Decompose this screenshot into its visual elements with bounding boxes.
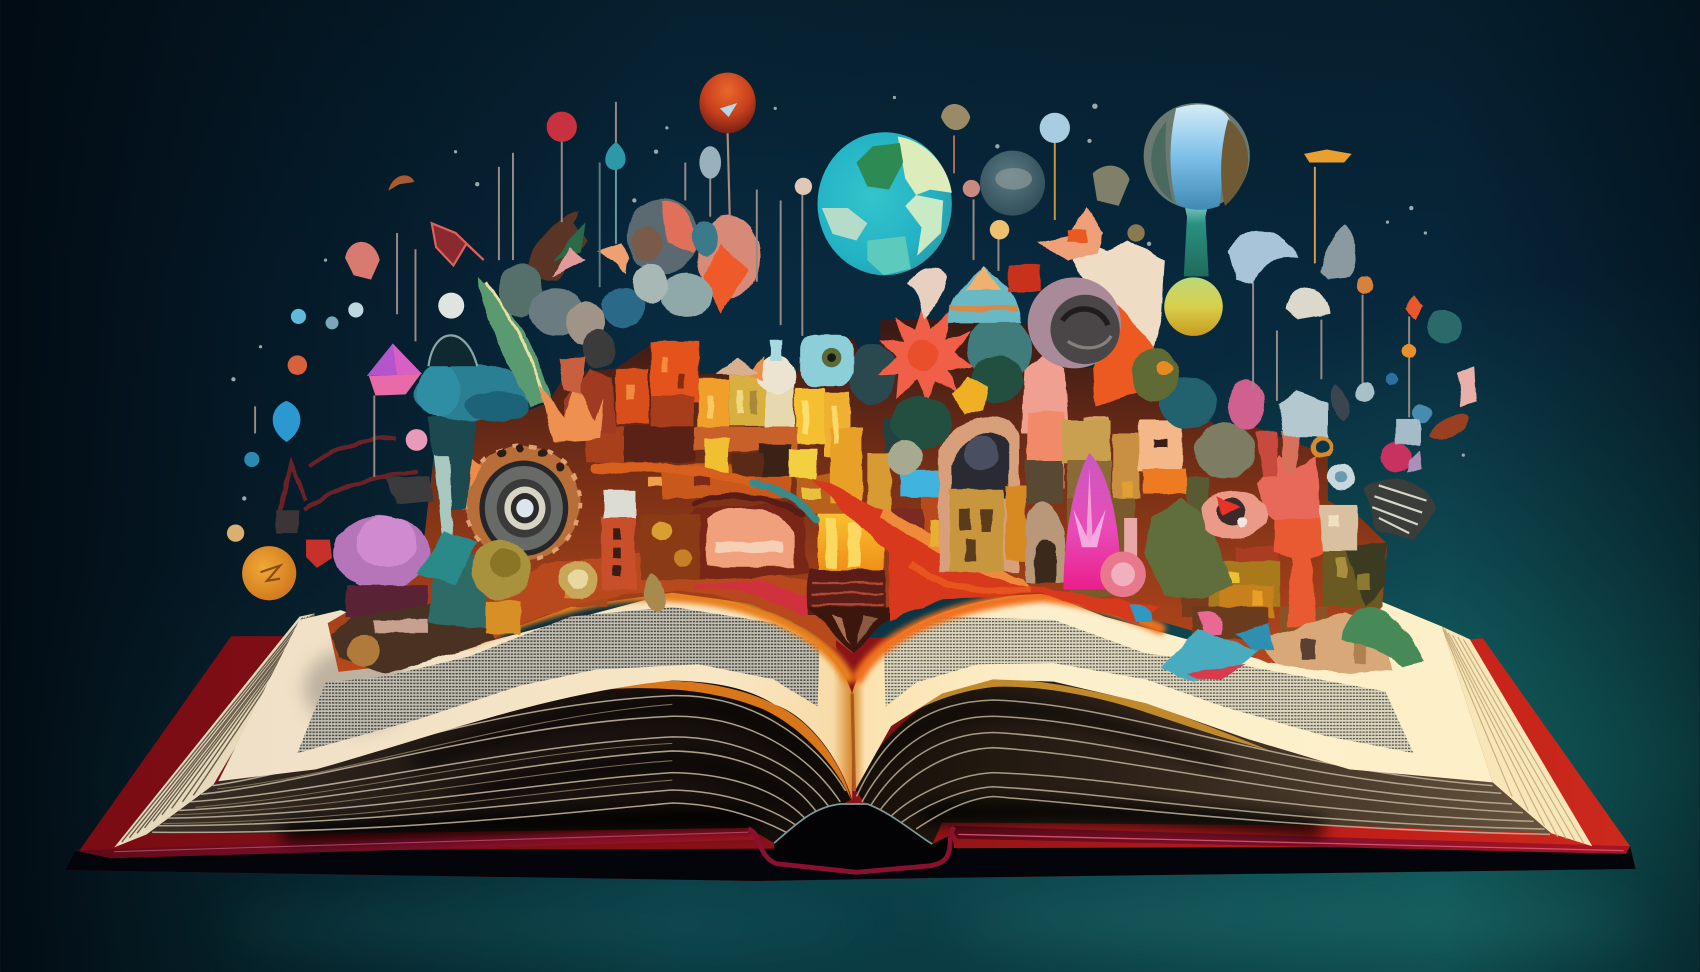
dark green bush xyxy=(891,397,952,449)
left tower xyxy=(602,516,635,589)
salmon dress xyxy=(1257,455,1320,520)
gear machine xyxy=(458,444,580,560)
olive gold bush xyxy=(472,540,530,600)
dark red block xyxy=(808,570,886,615)
sky blue block xyxy=(900,470,939,497)
beige arch house xyxy=(1026,502,1067,583)
pale blue robot xyxy=(800,334,853,386)
left orange page edge xyxy=(607,681,851,800)
gold and right mass xyxy=(1209,561,1280,607)
cover black underside xyxy=(65,846,1636,881)
red planet xyxy=(699,73,756,217)
cream feather xyxy=(907,268,948,319)
golden buildings xyxy=(698,379,729,427)
right gold page edge xyxy=(891,679,1268,750)
red box xyxy=(1008,264,1041,293)
floating bubbles xyxy=(596,198,760,316)
fine building details xyxy=(394,358,1370,658)
purple flower xyxy=(334,516,430,589)
orange red tower xyxy=(1275,516,1322,626)
teal bush xyxy=(967,316,1032,381)
page glow under the city xyxy=(469,595,1160,677)
disc machine and fins xyxy=(1036,208,1165,406)
stems and lollipops xyxy=(255,102,1409,477)
left foliage and flower xyxy=(277,211,666,674)
small floating objects left xyxy=(227,112,626,600)
dome interior under the left arch xyxy=(672,501,808,580)
rust band along the left page xyxy=(477,553,837,650)
green leaf xyxy=(477,276,551,406)
robot eye xyxy=(822,348,841,367)
warm fill patches xyxy=(542,344,1279,618)
right orange bridge xyxy=(813,477,1160,623)
left page xyxy=(218,593,852,800)
shells on the right page xyxy=(1161,607,1424,683)
glass bubbles xyxy=(499,264,542,316)
bottom funnel xyxy=(808,607,900,653)
glass sphere xyxy=(980,151,1045,216)
yellow lantern xyxy=(952,377,989,414)
tan arch building xyxy=(939,416,1019,572)
small floating objects right xyxy=(1228,225,1476,540)
pink band along the centre xyxy=(694,580,824,618)
city base mass xyxy=(328,320,1387,672)
right page text block xyxy=(884,617,1413,753)
peach towers xyxy=(1021,355,1069,433)
golden tall tower xyxy=(867,453,891,513)
left page text block xyxy=(297,607,820,753)
spine gutter line xyxy=(852,694,854,791)
book cover xyxy=(65,636,1636,881)
city: buildings and bridges xyxy=(394,341,1392,674)
dark arcs left xyxy=(280,438,418,509)
glass balloon with yellow sphere xyxy=(1144,103,1250,336)
peach house xyxy=(1139,420,1183,470)
disc xyxy=(1028,277,1121,368)
dome xyxy=(948,267,1021,323)
right crimson strip xyxy=(950,826,1630,854)
orange petals xyxy=(539,385,603,442)
right trees and objects xyxy=(1131,349,1329,635)
pink tent and flask xyxy=(1063,453,1152,622)
spine black arch and red fold xyxy=(114,804,1624,872)
red orange buildings xyxy=(616,368,648,423)
orange bridge arcs xyxy=(595,467,815,520)
grey bush xyxy=(888,440,923,475)
centre flowers and trees xyxy=(716,264,1041,475)
yellow stack xyxy=(817,514,885,570)
peach buildings on right page xyxy=(1255,612,1392,674)
salmon spiked flower xyxy=(878,303,974,403)
right page xyxy=(852,593,1493,791)
lower left mass xyxy=(331,596,497,674)
small domes xyxy=(757,355,796,394)
gear disc rings xyxy=(479,461,568,556)
dark teal tree drip xyxy=(428,412,477,509)
left crimson strip xyxy=(75,826,757,858)
feather plant xyxy=(525,211,588,280)
globe xyxy=(817,132,952,275)
gold bush by arch xyxy=(1006,485,1026,561)
left page edges xyxy=(114,613,315,847)
scattered particles xyxy=(231,96,1465,501)
small floating objects top xyxy=(699,104,1352,242)
right dark page block xyxy=(855,679,1551,844)
magenta house xyxy=(367,344,422,396)
zebra stripes xyxy=(1372,485,1426,533)
left dark page block xyxy=(147,681,851,843)
right page edges xyxy=(1442,626,1592,846)
